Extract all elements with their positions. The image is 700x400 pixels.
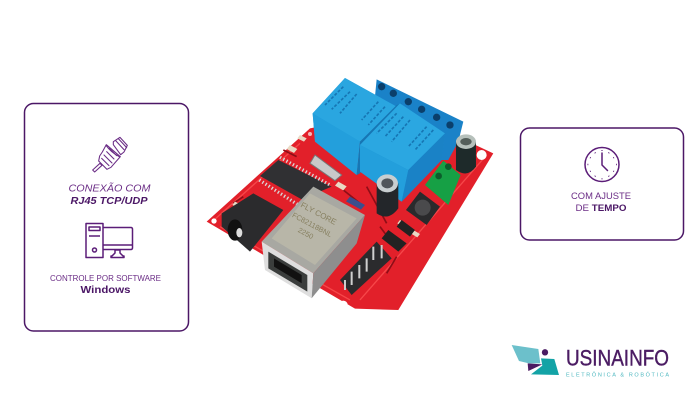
product photo: relay board: 2250 bbox=[296, 225, 315, 241]
text: de tempo: DE TEMPO bbox=[576, 203, 626, 213]
small ics bbox=[397, 220, 415, 237]
product photo: relay board: FC82118BNL bbox=[291, 210, 334, 239]
relay one bbox=[313, 78, 397, 175]
icon: clock bbox=[585, 148, 619, 182]
terminal block blue bbox=[373, 79, 463, 160]
text: Windows: Windows bbox=[80, 284, 131, 296]
logo: UsinaInfo bbox=[512, 345, 669, 378]
text: software control: CONTROLE POR SOFTWARE bbox=[50, 274, 161, 283]
relay two bbox=[360, 103, 445, 202]
board pcb bbox=[207, 113, 493, 310]
text: com ajuste: COM AJUSTE bbox=[571, 191, 631, 201]
capacitor right bbox=[456, 142, 476, 173]
relay gap bbox=[357, 103, 402, 175]
panel: left features bbox=[24, 104, 188, 331]
icon: desktop computer bbox=[86, 224, 132, 258]
product photo: relay board: FLY CORE bbox=[299, 200, 338, 227]
chip bbox=[260, 160, 332, 199]
crystal bbox=[310, 155, 342, 181]
power jack bbox=[222, 193, 283, 252]
logo wordmark: USINAINFO bbox=[566, 346, 669, 370]
capacitor centre bbox=[377, 183, 398, 217]
inductor bbox=[406, 192, 440, 225]
logo tagline: ELETRÔNICA & ROBÓTICA bbox=[566, 372, 669, 378]
pin header bbox=[340, 242, 392, 295]
icon: RJ45 connector bbox=[93, 137, 127, 172]
heading: connection: CONEXÃO COM bbox=[68, 182, 151, 194]
logo mark bbox=[512, 345, 559, 375]
text: RJ45 TCP/UDP: RJ45 TCP/UDP bbox=[70, 195, 149, 207]
panel: right feature bbox=[520, 128, 684, 240]
product photo: relay board bbox=[207, 78, 493, 310]
rj45 jack bbox=[262, 187, 365, 273]
green terminal bbox=[425, 161, 461, 205]
